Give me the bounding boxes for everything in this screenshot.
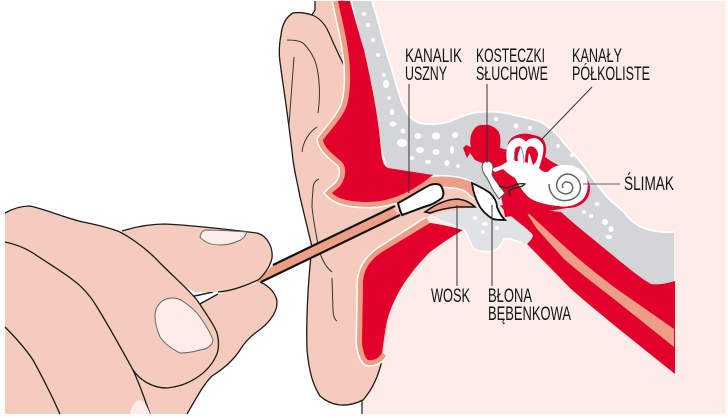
label: blona bebenkowa: BĘBENKOWA (488, 304, 571, 325)
swab head (398, 184, 444, 215)
label: kosteczki sluchowe: SŁUCHOWE (476, 64, 548, 85)
upper red cavity (323, 1, 433, 202)
ossicles (482, 161, 525, 199)
swab stick (255, 208, 398, 284)
middle ear red cavity (463, 125, 590, 217)
lower bone below canal (430, 200, 540, 252)
salmon lining of upper red cavity (323, 1, 478, 202)
bone (352, 1, 674, 284)
label: kanalik uszny (405, 46, 462, 85)
label: kanalik uszny: USZNY (405, 64, 447, 85)
hand (5, 206, 277, 414)
label: kanalik uszny: KANALIK (405, 46, 462, 67)
lower red cavity with salmon lining (362, 222, 463, 360)
wax (425, 199, 475, 213)
inner ear labyrinth (491, 138, 588, 207)
cotton swab (255, 184, 444, 284)
salmon nerve strip (524, 209, 674, 347)
stick far end (190, 292, 213, 297)
label: kosteczki sluchowe (476, 46, 548, 85)
upper finger (122, 224, 272, 292)
nails (200, 230, 247, 245)
label: kanaly polkoliste: PÓŁKOLISTE (572, 63, 650, 85)
cochlea spiral (549, 174, 580, 201)
label: blona bebenkowa: BŁONA (488, 286, 532, 307)
panel: pink head background (362, 1, 726, 414)
inner red tube (500, 205, 675, 374)
label: wosk: WOSK (431, 286, 470, 307)
label: slimak: ŚLIMAK (624, 173, 674, 195)
outer ear (279, 1, 480, 414)
semicircular canal holes (514, 146, 538, 165)
leader lines (409, 84, 620, 286)
label: kosteczki sluchowe: KOSTECZKI (476, 46, 545, 67)
bone pores (362, 12, 614, 239)
eardrum (472, 183, 505, 220)
label: kanaly polkoliste (572, 46, 650, 85)
lower finger (130, 282, 277, 414)
label: blona bebenkowa (488, 286, 571, 325)
palm and thumb (5, 206, 218, 414)
label: kanaly polkoliste: KANAŁY (572, 46, 622, 67)
